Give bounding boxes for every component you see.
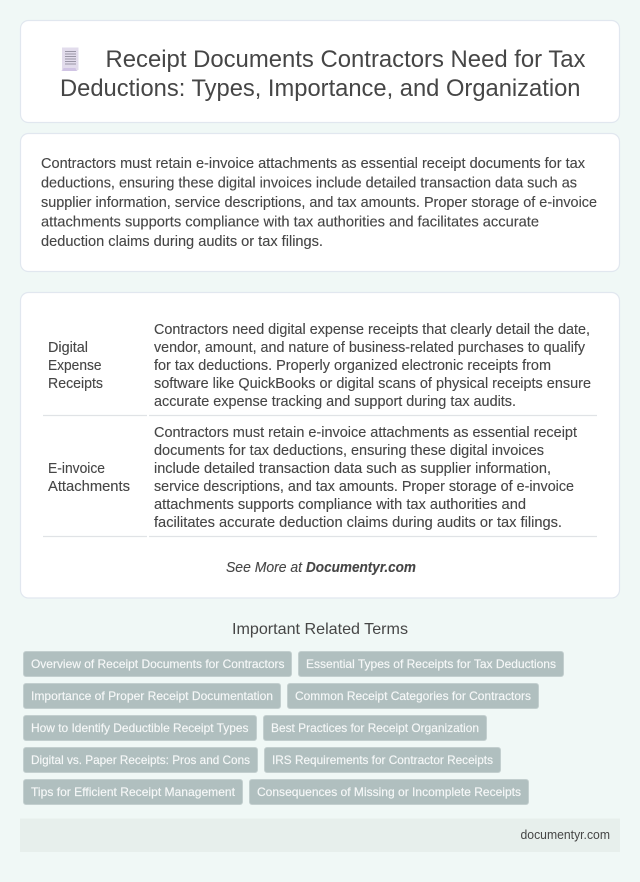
panel: receipt types table xyxy=(20,292,620,598)
title: Receipt Documents Contractors Need for Tax xyxy=(106,46,586,73)
row text: e-invoice attachments xyxy=(154,425,577,531)
chip xyxy=(298,652,564,676)
title: Deductions: Types, Importance, and Organization xyxy=(60,75,580,102)
heading: important related terms: Important Related Terms xyxy=(232,621,408,638)
row label: e-invoice attachments xyxy=(48,461,130,495)
row text: digital expense receipts: software like QuickBooks or digital scans of physical receipts ensure xyxy=(154,376,591,392)
chip xyxy=(24,716,256,740)
chip xyxy=(264,716,486,740)
chip xyxy=(264,748,500,772)
icon: receipt xyxy=(60,48,79,71)
chip: Essential Types of Receipts for Tax Deductions xyxy=(306,657,556,671)
row text: e-invoice attachments: include detailed transaction data such as supplier information, xyxy=(154,461,551,477)
chip: Overview of Receipt Documents for Contractors xyxy=(31,657,284,671)
row text: digital expense receipts xyxy=(154,322,591,410)
chip xyxy=(24,780,242,804)
row text: digital expense receipts: Contractors need digital expense receipts that clearly detail the date, xyxy=(154,322,590,338)
chip: Importance of Proper Receipt Documentation xyxy=(31,689,273,703)
row text: digital expense receipts: for tax deductions. Properly organized electronic receipts from xyxy=(154,358,551,374)
title xyxy=(60,46,586,102)
chip: IRS Requirements for Contractor Receipts xyxy=(272,753,493,767)
see more link: Documentyr.com xyxy=(306,560,416,576)
chip xyxy=(24,748,258,772)
row label: e-invoice attachments: E-invoice xyxy=(48,461,105,477)
row label: digital expense receipts: Digital xyxy=(48,340,88,356)
chip: Tips for Efficient Receipt Management xyxy=(31,785,236,799)
summary paragraph: supplier information, service descriptions, and tax amounts. Proper storage of e-invoice xyxy=(41,195,597,211)
row text: digital expense receipts: vendor, amount, and nature of business-related purchases to qualify xyxy=(154,340,586,356)
footer bar: documentyr.com xyxy=(520,828,610,842)
row text: digital expense receipts: accurate expense tracking and support during tax audits. xyxy=(154,394,516,410)
summary paragraph: attachments supports compliance with tax authorities and facilitates accurate xyxy=(41,214,539,230)
summary paragraph xyxy=(41,156,597,250)
chip: How to Identify Deductible Receipt Types xyxy=(31,721,248,735)
summary paragraph: Contractors must retain e-invoice attachments as essential receipt documents for tax xyxy=(41,156,586,172)
chip xyxy=(288,684,538,708)
panel: summary card xyxy=(20,134,620,272)
summary paragraph: deduction claims during audits or tax filings. xyxy=(41,234,323,250)
chip: Consequences of Missing or Incomplete Receipts xyxy=(257,785,521,799)
row label: digital expense receipts: Expense xyxy=(48,358,102,374)
chip: Digital vs. Paper Receipts: Pros and Cons xyxy=(31,753,250,767)
row label: digital expense receipts xyxy=(48,340,103,392)
row text: e-invoice attachments: service descriptions, and tax amounts. Proper storage of e-invoice xyxy=(154,479,574,495)
row label: e-invoice attachments: Attachments xyxy=(48,479,130,495)
row text: e-invoice attachments: attachments supports compliance with tax authorities and xyxy=(154,497,526,513)
see more link: See More at xyxy=(226,560,303,576)
see more link xyxy=(226,560,416,576)
row text: e-invoice attachments: Contractors must retain e-invoice attachments as essential receipt xyxy=(154,425,577,441)
summary paragraph: deductions, ensuring these digital invoices include detailed transaction data such as xyxy=(41,176,577,192)
chip xyxy=(24,684,280,708)
footer bar xyxy=(20,818,620,852)
chip: Common Receipt Categories for Contractors xyxy=(295,689,531,703)
chip xyxy=(24,652,292,676)
panel: title card xyxy=(20,20,620,122)
related terms chips xyxy=(24,652,564,804)
chip: Best Practices for Receipt Organization xyxy=(271,721,479,735)
row text: e-invoice attachments: documents for tax deductions, ensuring these digital invoices xyxy=(154,443,544,459)
chip xyxy=(250,780,528,804)
row text: e-invoice attachments: facilitates accurate deduction claims during audits or tax filings. xyxy=(154,515,562,531)
row label: digital expense receipts: Receipts xyxy=(48,376,103,392)
